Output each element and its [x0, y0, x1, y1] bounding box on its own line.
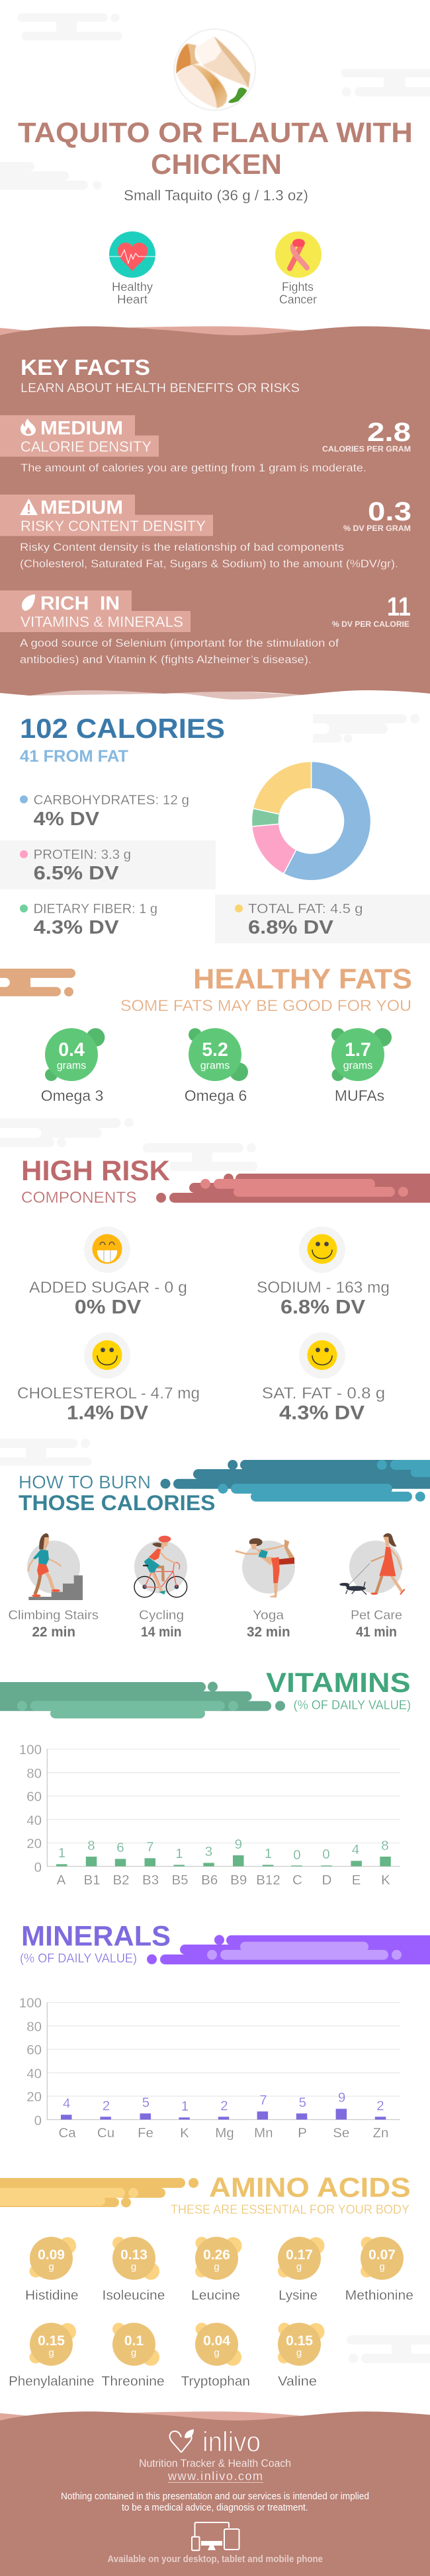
legend: carbohydrates: CARBOHYDRATES: 12 g	[34, 793, 189, 808]
title: TAQUITO OR FLAUTA WITH	[18, 117, 413, 149]
icon: leaf	[22, 594, 35, 611]
activity: yoga: Yoga	[253, 1608, 284, 1623]
vitamin names: B12	[256, 1872, 280, 1888]
decoration: tan bars	[0, 969, 75, 996]
vitamin values: 3	[205, 1844, 212, 1859]
mineral names: K	[180, 2126, 189, 2141]
subheading: from fat: 41 FROM FAT	[20, 747, 128, 766]
amino: tryptophan: g	[214, 2347, 220, 2358]
y axis labels: 60	[26, 2042, 42, 2058]
heading: those calories: THOSE CALORIES	[19, 1491, 216, 1515]
vitamin names	[57, 1872, 390, 1888]
bar chart: minerals	[19, 1995, 400, 2141]
amino: histidine: g	[48, 2261, 54, 2273]
activity: cycling: 14 min	[141, 1625, 181, 1640]
amino: lysine	[278, 2237, 324, 2303]
y axis labels: 20	[26, 2089, 42, 2105]
panel: healthy fats	[0, 963, 412, 1104]
component: saturated fat: SAT. FAT - 0.8 g	[262, 1385, 385, 1402]
vitamin names: B3	[142, 1872, 159, 1888]
subheading: SOME FATS MAY BE GOOD FOR YOU	[120, 997, 411, 1015]
fat: omega 3: grams	[57, 1061, 86, 1071]
vitamin values: 1	[58, 1845, 65, 1861]
activity: climbing stairs: Climbing Stairs	[8, 1608, 99, 1623]
y axis labels: 100	[19, 1995, 42, 2011]
amino: tryptophan: 0.04	[203, 2333, 230, 2349]
component: added sugar: 0% DV	[75, 1297, 141, 1318]
fact: calorie density	[0, 415, 411, 474]
vitamin values: 8	[87, 1838, 95, 1853]
y axis labels: 40	[26, 2066, 42, 2081]
mineral values: 5	[142, 2095, 150, 2111]
panel: high risk components	[17, 1155, 430, 1424]
mineral names: P	[298, 2126, 307, 2141]
component: cholesterol: 1.4% DV	[67, 1402, 148, 1424]
component: added sugar	[29, 1227, 187, 1318]
vitamin names: B5	[171, 1872, 189, 1888]
benefit: healthy heart	[109, 231, 155, 306]
amino: phenylalanine: 0.15	[38, 2333, 65, 2349]
amino: leucine: Leucine	[191, 2288, 240, 2303]
fact: rich in vitamins and minerals: VITAMINS & MINERALS	[21, 614, 183, 630]
vitamin names: B6	[201, 1872, 218, 1888]
vitamin names: E	[352, 1872, 361, 1888]
activity: cycling	[134, 1536, 187, 1640]
vitamin values: 4	[352, 1842, 359, 1857]
panel: minerals	[19, 1921, 430, 2141]
amino: valine	[278, 2323, 324, 2389]
icon: heart	[109, 231, 155, 278]
amino: valine: 0.15	[286, 2333, 313, 2349]
logo: inlivo	[170, 2427, 261, 2458]
vitamin values: 1	[175, 1846, 183, 1861]
fact: calorie density: CALORIES PER GRAM	[322, 446, 411, 454]
y axis labels: 20	[26, 1836, 42, 1851]
mineral names: Mg	[215, 2126, 234, 2141]
fact: risky content density: 0.3	[368, 497, 411, 526]
panel: footer	[0, 2411, 430, 2576]
mineral values: 1	[181, 2099, 189, 2114]
mineral values: 9	[338, 2090, 345, 2105]
amino: tryptophan: Tryptophan	[181, 2374, 250, 2389]
component: sodium	[257, 1227, 390, 1318]
y axis labels: 80	[26, 2019, 42, 2034]
subheading: THESE ARE ESSENTIAL FOR YOUR BODY	[171, 2203, 409, 2217]
fact: risky content density: RISKY CONTENT DENSITY	[21, 518, 206, 534]
subheading: percent of daily value: (% OF DAILY VALUE)	[20, 1952, 137, 1966]
legend: protein: PROTEIN: 3.3 g	[34, 848, 131, 862]
subheading: percent of daily value: (% OF DAILY VALUE)	[294, 1699, 411, 1712]
component: sodium: 6.8% DV	[280, 1297, 365, 1318]
macro backgrounds	[0, 840, 430, 944]
heading: how to burn: HOW TO BURN	[19, 1472, 151, 1492]
title	[18, 117, 413, 181]
amino: tryptophan	[181, 2323, 250, 2389]
vitamin values: 1	[265, 1846, 272, 1861]
fact: rich in vitamins and minerals: 11	[387, 592, 411, 622]
amino: phenylalanine: Phenylalanine	[9, 2374, 95, 2389]
bar chart: vitamins	[19, 1742, 400, 1888]
mineral values: 2	[220, 2099, 228, 2114]
food photo	[174, 29, 255, 110]
vitamin names: B1	[83, 1872, 101, 1888]
mineral names	[58, 2126, 388, 2141]
fact: risky content density	[0, 495, 411, 570]
heading: 102 calories: 102 CALORIES	[20, 713, 225, 744]
amino: isoleucine: Isoleucine	[102, 2288, 165, 2303]
y axis labels	[19, 1742, 42, 1875]
heading: high risk: HIGH RISK	[21, 1155, 170, 1187]
amino: phenylalanine	[9, 2323, 95, 2389]
y axis labels: 40	[26, 1813, 42, 1828]
activity: climbing stairs	[8, 1533, 99, 1640]
decoration: yellow bars	[0, 2178, 198, 2207]
benefit: fights cancer: Fights	[282, 280, 314, 294]
fact: calorie density: MEDIUM	[40, 418, 123, 439]
fact: calorie density: The amount of calories you are getting from 1 gram is moderate.	[21, 462, 366, 474]
amino: methionine: 0.07	[368, 2247, 396, 2263]
panel: calories	[0, 713, 430, 944]
subtitle: serving size: Small Taquito (36 g / 1.3 oz)	[124, 187, 308, 204]
fact: risky content density: (Cholesterol, Saturated Fat, Sugars & Sodium) to the amount (%DV/gr).	[20, 557, 398, 570]
legend: protein: 6.5% DV	[34, 863, 119, 884]
activity: climbing stairs: 22 min	[32, 1625, 75, 1640]
mineral values: 5	[299, 2095, 306, 2111]
benefit: fights cancer	[275, 231, 322, 306]
y axis labels: 0	[34, 1860, 42, 1875]
amino: leucine	[191, 2237, 242, 2303]
amino: threonine: 0.1	[124, 2333, 144, 2349]
panel: how to burn those calories	[8, 1460, 430, 1640]
mineral values: 4	[63, 2096, 70, 2111]
heading: minerals: MINERALS	[21, 1921, 171, 1952]
component: sodium: SODIUM - 163 mg	[257, 1279, 390, 1297]
amino: isoleucine	[102, 2237, 165, 2303]
mineral names: Fe	[138, 2126, 153, 2141]
subheading: LEARN ABOUT HEALTH BENEFITS OR RISKS	[21, 381, 300, 395]
amino: leucine: g	[214, 2261, 220, 2273]
mineral values: 2	[103, 2099, 110, 2114]
amino: lysine: g	[296, 2261, 302, 2273]
amino: phenylalanine: g	[48, 2347, 54, 2358]
amino: leucine: 0.26	[203, 2247, 230, 2263]
legend: dietary fiber	[20, 902, 157, 938]
fact: rich in vitamins and minerals	[0, 590, 411, 666]
activity: pet care: 41 min	[356, 1625, 397, 1640]
fact: rich in vitamins and minerals: A good source of Selenium (important for the stimulation of	[20, 637, 339, 649]
icon: devices	[192, 2522, 239, 2550]
vitamin values: 7	[146, 1839, 154, 1855]
fat: omega 3: Omega 3	[41, 1087, 103, 1104]
vitamin values: 9	[235, 1837, 242, 1852]
mineral values: 2	[376, 2099, 384, 2114]
fat: MUFAs: grams	[343, 1061, 372, 1071]
vitamin names: C	[292, 1872, 302, 1888]
y axis labels	[19, 1995, 42, 2128]
component: cholesterol	[17, 1332, 200, 1424]
availability note: Available on your desktop, tablet and mobile phone	[107, 2554, 323, 2565]
benefit: healthy heart: Healthy	[112, 280, 153, 294]
fact: risky content density: % DV PER GRAM	[343, 525, 411, 533]
legend: total fat	[235, 902, 363, 938]
fat: omega 6: Omega 6	[185, 1087, 247, 1104]
mineral names: Cu	[97, 2126, 114, 2141]
fact: risky content density: MEDIUM	[40, 497, 123, 518]
title: CHICKEN	[151, 149, 282, 181]
disclaimer: Nothing contained in this presentation and our services is intended or implied	[61, 2491, 369, 2502]
mineral names: Se	[333, 2126, 349, 2141]
y axis labels: 60	[26, 1789, 42, 1804]
amino: isoleucine: 0.13	[120, 2247, 148, 2263]
amino: histidine	[25, 2237, 79, 2303]
decoration: teal bars	[160, 1460, 430, 1502]
amino: isoleucine: g	[131, 2261, 136, 2273]
legend: carbohydrates: 4% DV	[34, 809, 99, 830]
mineral values: 7	[259, 2093, 267, 2108]
activity: yoga: 32 min	[247, 1625, 290, 1640]
component: saturated fat: 4.3% DV	[279, 1402, 365, 1424]
disclaimer	[61, 2491, 369, 2513]
subheading: components: COMPONENTS	[21, 1189, 136, 1207]
panel: amino acids	[0, 2172, 413, 2389]
mineral names: Zn	[373, 2126, 388, 2141]
panel: vitamins	[0, 1667, 411, 1888]
legend: total fat: TOTAL FAT: 4.5 g	[248, 902, 363, 916]
mineral names: Ca	[58, 2126, 76, 2141]
legend: carbohydrates	[20, 793, 189, 830]
fact: rich in vitamins and minerals: antibodies) and Vitamin K (fights Alzheimer’s disease).	[20, 653, 312, 666]
vitamin values: 0	[322, 1847, 330, 1862]
mineral values	[63, 2090, 384, 2114]
vitamin names: D	[322, 1872, 331, 1888]
amino: valine: Valine	[278, 2374, 317, 2389]
amino: methionine: Methionine	[345, 2288, 413, 2303]
disclaimer: to be a medical advice, diagnosis or treatment.	[122, 2503, 308, 2513]
amino: methionine: g	[379, 2261, 385, 2273]
vitamin names: A	[57, 1872, 66, 1888]
fat: MUFAs: 1.7	[345, 1039, 371, 1061]
website link: www.inlivo.com	[167, 2470, 263, 2483]
vitamin names: K	[381, 1872, 390, 1888]
icon: ribbon	[275, 231, 322, 278]
amino: lysine: 0.17	[286, 2247, 313, 2263]
amino: histidine: Histidine	[25, 2288, 79, 2303]
fact: calorie density: CALORIE DENSITY	[21, 438, 151, 455]
vitamin values: 0	[293, 1847, 301, 1863]
amino: threonine: Threonine	[101, 2374, 165, 2389]
decoration: purple bars	[147, 1935, 430, 1964]
vitamin names: B9	[230, 1872, 247, 1888]
amino: threonine: g	[131, 2347, 136, 2358]
fat: omega 3	[41, 1028, 105, 1104]
fact: risky content density: Risky Content density is the relationship of bad components	[20, 541, 344, 553]
vitamin values: 6	[116, 1840, 124, 1855]
benefit: healthy heart: Heart	[117, 293, 148, 306]
fat: MUFAs	[331, 1028, 392, 1104]
heading: key facts: KEY FACTS	[21, 356, 150, 380]
vitamin bars	[56, 1855, 391, 1867]
amino: lysine: Lysine	[279, 2288, 318, 2303]
fact: calorie density: 2.8	[367, 418, 411, 447]
fat: omega 3: 0.4	[58, 1039, 85, 1061]
component: cholesterol: CHOLESTEROL - 4.7 mg	[17, 1385, 200, 1402]
icon: flame	[21, 419, 36, 436]
heading: amino acids: AMINO ACIDS	[209, 2172, 411, 2203]
activity: pet care: Pet Care	[351, 1608, 402, 1623]
fat: MUFAs: MUFAs	[335, 1087, 384, 1104]
vitamin names: B2	[112, 1872, 130, 1888]
fact: rich in vitamins and minerals: % DV PER CALORIE	[332, 621, 409, 629]
benefit: fights cancer: Cancer	[279, 293, 317, 306]
legend: protein	[20, 848, 131, 884]
logo: inlivo: inlivo	[202, 2427, 261, 2458]
fact: rich in vitamins and minerals: RICH IN	[40, 593, 120, 614]
tagline: Nutrition Tracker & Health Coach	[139, 2457, 291, 2470]
activity: pet care	[339, 1533, 405, 1640]
component: added sugar: ADDED SUGAR - 0 g	[29, 1279, 187, 1297]
heading: healthy fats: HEALTHY FATS	[193, 963, 412, 995]
donut chart	[251, 762, 371, 881]
y axis labels: 80	[26, 1766, 42, 1781]
legend: dietary fiber: 4.3% DV	[34, 917, 119, 938]
mineral names: Mn	[254, 2126, 273, 2141]
fat: omega 6: 5.2	[202, 1039, 228, 1061]
icon: warning triangle	[20, 499, 38, 515]
activity: yoga	[236, 1538, 295, 1640]
fat: omega 6: grams	[200, 1061, 230, 1071]
heading: vitamins: VITAMINS	[266, 1667, 411, 1698]
y axis labels: 0	[34, 2113, 42, 2128]
vitamin values	[58, 1837, 389, 1863]
legend: total fat: 6.8% DV	[248, 917, 333, 938]
activity: cycling: Cycling	[139, 1608, 184, 1623]
decoration: green bars	[0, 1682, 285, 1718]
amino: threonine	[101, 2323, 165, 2389]
amino: methionine	[345, 2237, 413, 2303]
component: saturated fat	[262, 1332, 385, 1424]
legend: dietary fiber: DIETARY FIBER: 1 g	[34, 902, 157, 916]
mineral bars	[61, 2109, 386, 2120]
y axis labels: 100	[19, 1742, 42, 1757]
panel: key facts	[0, 327, 430, 700]
amino: histidine: 0.09	[38, 2247, 65, 2263]
decoration: red bars	[156, 1174, 430, 1203]
fat: omega 6	[185, 1028, 248, 1104]
vitamin values: 8	[381, 1838, 389, 1853]
amino: valine: g	[296, 2347, 302, 2358]
